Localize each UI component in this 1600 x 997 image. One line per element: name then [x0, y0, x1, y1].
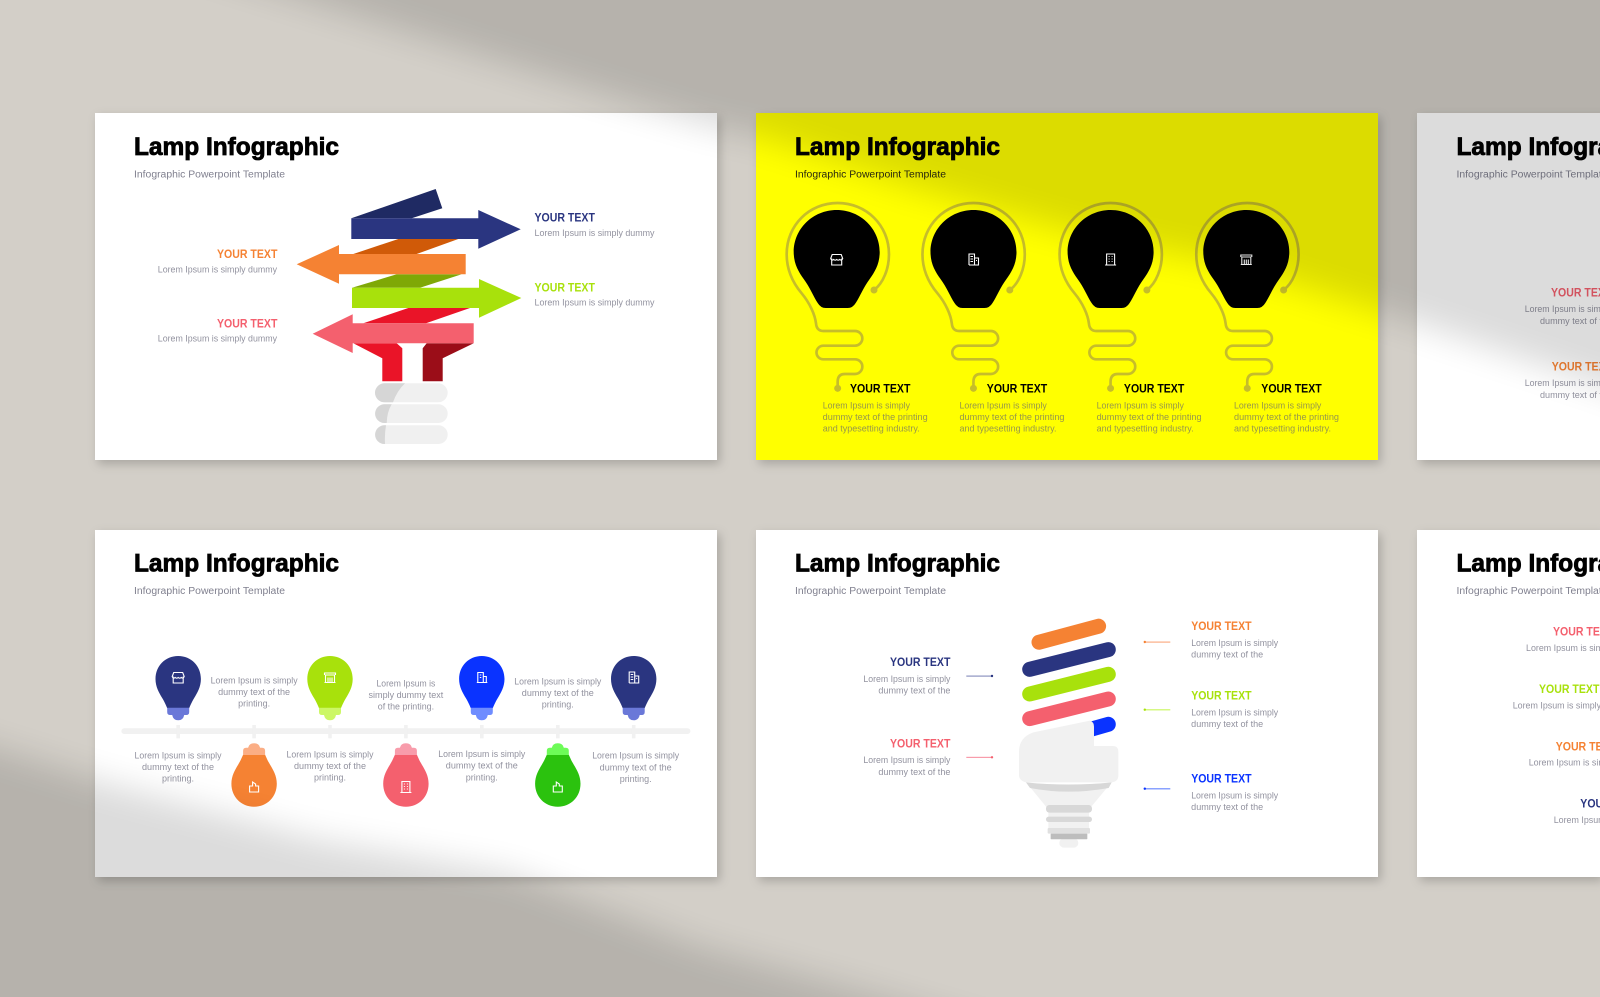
bulb 2: dummy text of the printing [960, 412, 1065, 422]
bulb 1: YOUR TEXT [850, 384, 910, 396]
subtitle: Infographic Powerpoint Template [134, 170, 285, 180]
bulb: orange [231, 743, 277, 807]
label: blue: Lorem Ipsum is simply [1191, 790, 1279, 800]
label: pink: YOUR TEXT [890, 738, 950, 750]
label: navy: YOUR TEXT [890, 657, 950, 669]
text above 3: Lorem Ipsum is simply [514, 676, 602, 686]
text above 1: printing. [238, 699, 270, 709]
subtitle: Infographic Powerpoint Template [795, 170, 946, 180]
bulb 4: YOUR TEXT [1261, 384, 1322, 396]
spiral lamp graphic [1019, 626, 1118, 848]
arrow lamp graphic [297, 189, 521, 444]
bulb 3: YOUR TEXT [1124, 384, 1184, 396]
label: orange [1529, 741, 1600, 768]
connector: lime [1144, 708, 1170, 711]
bulb 4: dummy text of the printing [1234, 412, 1339, 422]
text above 2: Lorem Ipsum is [376, 678, 436, 688]
title: Lamp Infographic [134, 133, 339, 161]
label: navy arrow [534, 213, 655, 238]
label: orange: dummy text of the [1191, 650, 1263, 660]
label: blue: YOUR TEXT [1191, 773, 1252, 785]
subtitle: Infographic Powerpoint Template [795, 586, 946, 597]
connector: navy [966, 675, 993, 677]
bulb 4: and typesetting industry. [1234, 424, 1331, 434]
text below 1 [134, 750, 222, 784]
label: green arrow: YOUR TEXT [534, 282, 595, 294]
bulb 1 [787, 203, 928, 434]
text below 3: printing. [466, 772, 498, 782]
label: orange [1525, 362, 1600, 400]
label: blue [1191, 773, 1279, 812]
subtitle: Infographic Powerpoint Template [134, 586, 285, 597]
label: pink arrow: YOUR TEXT [217, 318, 277, 330]
bulb: blue [459, 656, 504, 720]
bulb 1: dummy text of the printing [823, 412, 928, 422]
label: navy [863, 657, 951, 696]
label: navy: Lorem Ipsum is simply [863, 674, 951, 684]
label: pink: Lorem Ipsum is simply [863, 755, 951, 765]
bulb: navy store [156, 656, 201, 720]
bulb 2: and typesetting industry. [960, 424, 1057, 434]
connector: orange [1144, 641, 1170, 643]
bulb: green [535, 743, 580, 807]
panel: four black bulbs on yellow [756, 113, 1378, 460]
label: pink [863, 738, 951, 777]
bulb: lime [307, 656, 353, 720]
text below 4: dummy text of the [600, 762, 672, 772]
label: orange arrow: Lorem Ipsum is simply dummy [158, 264, 277, 274]
text above 3: printing. [542, 700, 574, 710]
panel: partial top right [1417, 113, 1600, 460]
bulb 3: and typesetting industry. [1097, 424, 1194, 434]
panel: spiral arrows [95, 113, 717, 460]
subtitle: Infographic Powerpoint Template [1456, 170, 1600, 180]
label: lime [1191, 690, 1279, 729]
text above 2 [369, 678, 444, 712]
title: Lamp Infographic [795, 133, 1000, 161]
text above 2: simply dummy text [369, 690, 444, 700]
bulb 4: Lorem Ipsum is simply [1234, 400, 1322, 410]
label: orange: Lorem Ipsum is simply [1191, 638, 1279, 648]
text below 3 [438, 749, 526, 782]
text below 3: dummy text of the [446, 761, 518, 771]
connector: blue [1144, 788, 1170, 790]
label: orange arrow [158, 249, 277, 274]
text above 3: dummy text of the [522, 688, 594, 698]
text below 4: Lorem Ipsum is simply [592, 751, 680, 761]
label: lime: YOUR TEXT [1191, 690, 1252, 702]
text below 2: Lorem Ipsum is simply [286, 749, 374, 759]
label: orange: YOUR TEXT [1191, 621, 1252, 633]
text below 2 [286, 749, 374, 783]
title: Lamp Infographic [795, 550, 1000, 578]
label: lime [1513, 684, 1600, 711]
label: orange arrow: YOUR TEXT [217, 249, 277, 261]
label: navy: dummy text of the [878, 686, 950, 696]
bulb 2 [922, 203, 1064, 434]
label: lime: Lorem Ipsum is simply [1191, 707, 1279, 717]
bulb: pink [383, 743, 429, 807]
panel: bulb timeline [95, 530, 717, 877]
label: navy arrow: Lorem Ipsum is simply dummy [534, 228, 655, 238]
text below 1: Lorem Ipsum is simply [134, 750, 222, 760]
text below 2: printing. [314, 773, 346, 783]
panel: partial bottom right [1417, 530, 1600, 877]
text above 1: Lorem Ipsum is simply [211, 675, 298, 685]
label: green arrow [534, 282, 655, 308]
label: green arrow: Lorem Ipsum is simply dummy [534, 298, 655, 308]
text below 3: Lorem Ipsum is simply [438, 749, 526, 759]
title: Lamp Infographic [134, 550, 339, 578]
bulb 1: Lorem Ipsum is simply [823, 400, 910, 410]
bulb 3 [1060, 203, 1202, 434]
bulb 2: Lorem Ipsum is simply [960, 400, 1047, 410]
label: pink arrow [158, 318, 277, 344]
bulb 1: and typesetting industry. [823, 424, 920, 434]
label: navy arrow: YOUR TEXT [534, 213, 595, 225]
label: pink: dummy text of the [878, 767, 950, 777]
label: lime: dummy text of the [1191, 719, 1263, 729]
label: pink [1526, 627, 1600, 653]
label: pink arrow: Lorem Ipsum is simply dummy [158, 334, 277, 344]
panel: spiral bulb [756, 530, 1378, 877]
text below 1: printing. [162, 774, 194, 784]
label: blue: dummy text of the [1191, 802, 1263, 812]
text below 4: printing. [620, 774, 652, 784]
subtitle: Infographic Powerpoint Template [1456, 586, 1600, 597]
text above 1 [211, 675, 298, 709]
timeline bar [121, 725, 690, 738]
text above 2: of the printing. [378, 702, 434, 712]
bulb 3: Lorem Ipsum is simply [1097, 400, 1184, 410]
bulb 2: YOUR TEXT [987, 384, 1047, 396]
bulb 3: dummy text of the printing [1097, 412, 1202, 422]
text below 1: dummy text of the [142, 762, 214, 772]
label: pink [1525, 288, 1600, 326]
connector: pink [966, 756, 993, 758]
text above 1: dummy text of the [218, 687, 290, 697]
text below 2: dummy text of the [294, 761, 366, 771]
bulb 4 [1196, 203, 1339, 434]
text above 3 [514, 676, 602, 710]
label: orange [1191, 621, 1279, 660]
label: navy [1554, 799, 1600, 825]
text below 4 [592, 751, 680, 784]
bulb: navy office [611, 656, 656, 720]
